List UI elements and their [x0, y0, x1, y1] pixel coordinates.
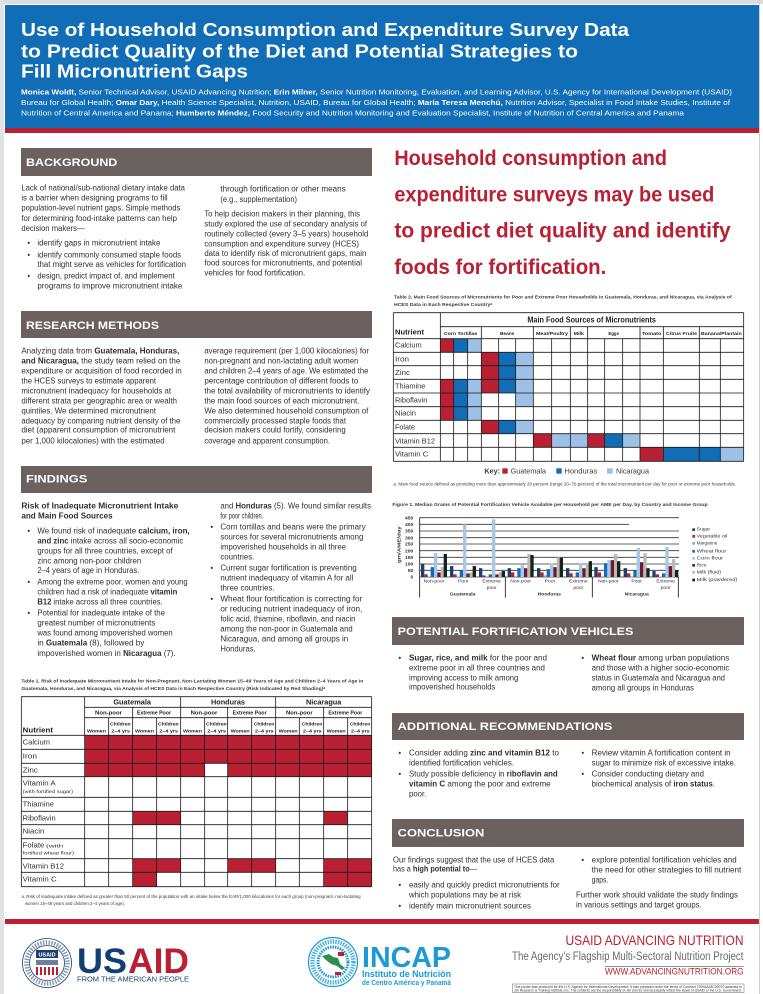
text: conclusion body: identify main micronutrient sources [409, 901, 531, 910]
text: recommendations bullets: Review vitamin A fortification content in [592, 748, 731, 757]
table 1 header labels: 2–4 yrs [159, 728, 178, 733]
text: background right column: vehicles for food fortification. [204, 269, 305, 278]
table 1 nutrient labels: Calcium [23, 738, 50, 747]
text: findings right column: or reducing nutrient inadequacy of iron, [220, 604, 362, 613]
panel: potential fortification vehicles [392, 617, 744, 692]
table 1 nutrient labels: Zinc [23, 766, 38, 775]
table 2 nutrient labels: Vitamin C [395, 450, 429, 459]
text: conclusion body: easily and quickly predict micronutrients for [409, 880, 560, 889]
disclaimer box [512, 984, 744, 993]
table 1 nutrient labels: Thiamine [23, 800, 54, 809]
text: research methods right column: We also determined household consumption of [204, 406, 369, 415]
text: research methods left column: diet (apparent consumption of micronutrient [21, 426, 176, 435]
text: background left column: identify commonly consumed staple foods [37, 251, 181, 260]
table 2 nutrient labels: Niacin [395, 409, 416, 418]
text: findings left column: and Main Food Sources [21, 512, 113, 521]
table 1 header labels: Extreme Poor [137, 710, 172, 716]
x axis labels: Poor [545, 578, 556, 584]
text: findings right column: sources for several micronutrients among [220, 532, 363, 541]
text: findings left column: B12 intake across all three countries. [37, 597, 163, 606]
chart legend [692, 527, 738, 583]
x axis labels: Non-poor [510, 578, 531, 584]
text: research methods right column: commercially processed staple foods that [204, 416, 347, 425]
text: findings left column: greatest number of micronutrients [37, 618, 155, 627]
title: Use of Household Consumption and Expenditure Survey Data [21, 19, 630, 40]
text: findings right column: nutrient inadequacy of vitamin A for all [220, 573, 354, 582]
y axis labels: 350 [405, 529, 414, 535]
table 1 header labels: Children [254, 721, 274, 726]
text: findings right column [210, 502, 371, 653]
heading: findings: FINDINGS [26, 474, 87, 486]
table 1 header labels: Women [135, 728, 154, 733]
y axis labels: 450 [405, 515, 414, 521]
y axis title: gm/AME/day [397, 526, 403, 563]
table 1 header labels: Women [87, 728, 106, 733]
text: findings left column: • [27, 577, 30, 586]
text: findings right column: Honduras. [220, 644, 256, 653]
x axis labels: Extreme [656, 578, 675, 584]
table 2 key: Honduras [564, 466, 598, 475]
text: research methods left column: adequacy by comparing nutrient density of the [21, 416, 181, 425]
text: fortification bullets: Wheat flour among urban populations [592, 653, 729, 662]
x axis labels: poor [573, 585, 584, 591]
text: research methods left column: quintiles. We determined micronutrient [21, 406, 157, 415]
chart legend: Sugar [697, 527, 710, 533]
table 2 caption [394, 294, 732, 308]
text: conclusion body: • [398, 901, 401, 910]
text: findings left column: was found among impoverished women [36, 628, 173, 637]
table 2 header labels: Beans [500, 331, 515, 336]
text: findings right column: folic acid, thiamine, riboflavin, and niacin [220, 614, 355, 623]
text: recommendations bullets: • [398, 769, 401, 778]
text: background left column [21, 184, 186, 291]
text: recommendations bullets: • [581, 748, 584, 757]
key message headline: expenditure surveys may be used [394, 182, 714, 206]
text: research methods left column [21, 347, 182, 445]
text: findings right column: three countries. [220, 583, 275, 592]
INCAP tagline: Instituto de Nutrición [362, 969, 451, 980]
table 2 header labels: Milk [574, 331, 584, 336]
table 1 header labels: Honduras [211, 697, 245, 706]
disclaimer box: JSI Research & Training Institute, Inc. The contents are the responsibility of JSI and do not necessarily reflect the views of USAID or the U.S. Government. [514, 989, 742, 993]
text: conclusion body: Our findings suggest that the use of HCES data [393, 855, 555, 864]
text: research methods right column: the total availability of micronutrients to identify [204, 386, 370, 395]
table 2 header labels: Meat/Poultry [536, 331, 568, 336]
authors [21, 87, 732, 118]
text: recommendations bullets: • [581, 769, 584, 778]
table 2 coloured cells [440, 339, 744, 461]
table 1 header labels: Children [206, 721, 227, 726]
text: findings left column: Risk of Inadequate Micronutrient Intake [21, 502, 179, 511]
text: conclusion body [393, 855, 742, 910]
text: background right column: routinely collected (every 3–5 years) household [204, 230, 368, 239]
text: findings left column: • [27, 608, 30, 617]
text: background left column: • [27, 251, 30, 260]
INCAP tagline: de Centro América y Panamá [362, 978, 452, 987]
table 1 nutrient labels: (with [46, 844, 64, 850]
table 1 nutrient labels [23, 738, 74, 884]
y axis labels: 150 [405, 555, 414, 561]
text: recommendations bullets: Study possible deficiency in riboflavin and [409, 769, 558, 778]
text: background left column: Lack of national/sub-national dietary intake data [21, 184, 186, 193]
x axis labels: Honduras [538, 592, 561, 598]
text: findings left column: Potential for inadequate intake of the [37, 608, 166, 617]
heading: research methods: RESEARCH METHODS [26, 320, 159, 332]
table 1 header labels: Women [279, 728, 298, 733]
table 2 key: Guatemala [511, 466, 547, 475]
text: conclusion body: in various settings and target groups. [576, 900, 702, 909]
text: fortification bullets: among all groups in Honduras [592, 683, 694, 692]
text: background right column [204, 185, 368, 278]
table 2 header labels: Nutrient [395, 328, 425, 337]
title: to Predict Quality of the Diet and Potential Strategies to [21, 40, 578, 61]
table 1 nutrient labels: Folate [23, 841, 44, 850]
USAID wordmark: US [77, 942, 127, 981]
text: recommendations bullets: sugar to minimize risk of excessive intake. [592, 758, 736, 767]
text: background left column: programs to improve micronutrient intake [37, 282, 183, 291]
text: findings right column: and Honduras (5). We found similar results [220, 502, 371, 511]
table 2 key: Key: [484, 466, 500, 475]
y axis labels: 400 [405, 522, 414, 528]
text: research methods left column: Analyzing data from Guatemala, Honduras, [21, 347, 179, 356]
text: research methods right column: and children 2–4 years of age. We estimated the [204, 367, 369, 376]
table 2 header labels: Main Food Sources of Micronutrients [527, 316, 656, 325]
text: findings left column: in Guatemala (8), followed by [37, 638, 144, 647]
table 1 header labels: Women [183, 728, 202, 733]
chart legend: Margarine [697, 540, 718, 546]
table 2 header labels: Citrus Fruits [666, 331, 697, 336]
panel: conclusion [392, 819, 744, 910]
table 2 caption: HCES Data in Each Respective Countryᵃ [394, 302, 492, 308]
chart legend: Corn flour [697, 555, 723, 561]
y axis labels: 50 [408, 568, 414, 574]
text: background right column: food sources for micronutrients, and potential [204, 259, 362, 268]
text: research methods left column: the HCES surveys to estimate apparent [21, 377, 157, 386]
text: findings right column: Current sugar fortification is preventing [220, 563, 357, 572]
text: findings left column: • [27, 526, 30, 535]
figure caption: Figure 1. Median Grams of Potential Fortification Vehicle Available per Household per AME per Day, by Country and Income Group [392, 502, 708, 508]
text: research methods right column: coverage and apparent consumption. [204, 436, 330, 445]
icon: USAID seal: USAID [38, 952, 56, 958]
y axis labels: 200 [405, 548, 414, 554]
table 1 nutrient labels: Vitamin A [23, 779, 57, 788]
text: findings right column: among the non-poor in Guatemala and [220, 624, 353, 633]
chart legend: Rice [697, 562, 707, 568]
heading: background: BACKGROUND [26, 157, 117, 169]
text: background left column: • [27, 272, 30, 281]
text: findings right column: Corn tortillas and beans were the primary [220, 523, 366, 532]
table 1 nutrient labels: (with fortified sugar) [23, 789, 73, 795]
y axis labels [405, 515, 414, 581]
text: fortification bullets: improving access to milk among [409, 673, 518, 682]
heading: additional recommendations [392, 713, 744, 740]
text: findings left column: groups for all three countries, except of [37, 546, 173, 555]
text: recommendations bullets [398, 748, 736, 798]
text: conclusion body: gaps. [592, 875, 608, 884]
bars [421, 519, 678, 577]
table 1 nutrient labels: Vitamin C [23, 875, 57, 884]
text: fortification bullets: Sugar, rice, and milk for the poor and [409, 653, 547, 662]
text: background left column: is a barrier when designing programs to fill [21, 194, 168, 203]
table 2 nutrient labels: Iron [395, 355, 409, 364]
table 1 nutrient labels: Riboflavin [23, 813, 56, 822]
table 1 header labels: Women [231, 728, 250, 733]
key message headline: to predict diet quality and identify [394, 219, 731, 243]
table 2 header labels [395, 316, 742, 337]
disclaimer box: This poster was produced for the U.S. Agency for International Development. It was prepared under the terms of Contract 7200AA18C00070 awarded to [514, 985, 742, 989]
panel: additional recommendations [392, 713, 744, 798]
text: findings right column: Nicaragua, and among all groups in [220, 634, 348, 643]
x axis labels: Non-poor [598, 578, 619, 584]
table 2 nutrient labels: Calcium [395, 341, 422, 350]
text: research methods right column: the main food sources of each micronutrient. [204, 396, 359, 405]
table 1 header labels: 2–4 yrs [303, 728, 322, 733]
table 1 header labels: 2–4 yrs [207, 728, 226, 733]
footer band [5, 919, 759, 993]
USAID wordmark [77, 942, 189, 981]
text: recommendations bullets: identified fortification vehicles. [409, 758, 514, 767]
text: findings right column: • [210, 594, 213, 603]
table 2 nutrient labels [395, 341, 435, 459]
key message headline: foods for fortification. [394, 255, 606, 279]
panel: findings [21, 466, 372, 658]
text: findings left column: 2–4 years of age in Honduras. [37, 566, 139, 575]
table 1 header labels: Children [302, 721, 322, 726]
table 2 key [484, 466, 650, 475]
table 1 header labels: 2–4 yrs [351, 728, 370, 733]
table 1 nutrient labels: Niacin [23, 827, 44, 836]
text: research methods right column: average requirement (per 1,000 kilocalories) for [204, 347, 369, 356]
x axis labels: Extreme [569, 578, 588, 584]
y axis labels: 0 [411, 575, 414, 581]
text: recommendations bullets: poor. [409, 789, 426, 798]
heading: additional recommendations: ADDITIONAL RECOMMENDATIONS [398, 721, 612, 733]
text: findings left column: We found risk of inadequate calcium, iron, [37, 526, 190, 535]
table 1 header labels: Nutrient [23, 725, 54, 734]
table 2 key: Nicaragua [616, 466, 650, 475]
text: background right column: To help decision makers in their planning, this [204, 210, 360, 219]
icon: INCAP seal [308, 938, 358, 986]
text: background right column: consumption and expenditure survey (HCES) [204, 240, 359, 249]
table 2 nutrient labels: Zinc [395, 368, 410, 377]
text: background left column: • [27, 239, 30, 248]
table 1 header labels: Children [110, 721, 131, 726]
text: research methods left column: micronutrient inadequacy for households at [21, 386, 172, 395]
x axis labels: poor [487, 585, 497, 591]
text: conclusion body: which populations may be at risk [408, 890, 521, 899]
table 1: risk of inadequate intake [21, 679, 372, 906]
authors: Nutrition of Central America and Panama; Humberto Méndez, Food Security and Nutrition Monitoring and Evaluation Specialist, Institute of Nutrition of Central America and Panama [21, 109, 685, 118]
text: findings right column: impoverished households in all three [220, 542, 347, 551]
x axis labels [424, 578, 675, 598]
icon: USAID seal [22, 938, 72, 988]
text: findings left column: impoverished women in Nicaragua (7). [37, 649, 176, 658]
USAID tagline: FROM THE AMERICAN PEOPLE [77, 975, 189, 984]
text: background left column: for determining food-intake patterns can help [21, 214, 178, 223]
project identity block: WWW.ADVANCINGNUTRITION.ORG [605, 966, 744, 978]
text: recommendations bullets: Consider conducting dietary and [592, 769, 704, 778]
title: Fill Micronutrient Gaps [21, 61, 248, 82]
text: findings right column: for poor children. [220, 512, 263, 521]
table 1 header labels: Guatemala [113, 697, 152, 706]
x axis labels: poor [661, 585, 671, 591]
table 1 header labels: 2–4 yrs [255, 728, 274, 733]
x axis labels: Poor [631, 578, 642, 584]
text: fortification bullets: and those with a higher socio-economic [592, 663, 729, 672]
table 2 nutrient labels: Folate [395, 423, 415, 432]
text: findings left column: and zinc intake across all socio-economic [37, 536, 183, 545]
table 1 header labels: Non-poor [286, 710, 313, 716]
table 2 caption: Table 2. Main Food Sources of Micronutrients for Poor and Extreme Poor Households in Guatemala, Honduras, and Nicaragua, via Analysis of [394, 294, 732, 300]
text: research methods right column [204, 347, 370, 445]
table 2: main food sources [393, 294, 744, 487]
text: conclusion body: Further work should validate the study findings [576, 890, 738, 899]
table 2 header labels: Corn Tortillas [444, 331, 478, 336]
project identity block [512, 932, 744, 978]
text: recommendations bullets: biochemical analysis of iron status. [592, 779, 715, 788]
text: findings right column: • [210, 523, 213, 532]
table 1 header labels: Extreme Poor [328, 710, 363, 716]
table 1 nutrient labels: fortified wheat flour) [23, 851, 74, 857]
table 1 footnote: women 15–49 years and children 2–4 years of age). [25, 901, 125, 906]
table 2 header labels: Eggs [608, 331, 619, 336]
heading: findings [21, 466, 372, 493]
header banner [5, 5, 759, 133]
text: findings left column: zinc among non-poor children [37, 556, 141, 565]
table 1 header labels: Extreme Poor [233, 710, 267, 716]
x axis labels: Extreme [482, 578, 501, 584]
table 1 header labels: Non-poor [95, 710, 123, 716]
text: background left column: design, predict impact of, and implement [37, 272, 175, 281]
table 1 nutrient labels: Iron [23, 752, 37, 761]
table 1 nutrient labels: Vitamin B12 [23, 862, 64, 871]
table 1 caption: Table 1. Risk of Inadequate Micronutrient Intake for Non-Pregnant, Non-Lactating Women 15–49 Years of Age and Children 2–4 Years of Age in [21, 679, 363, 685]
text: fortification bullets [398, 653, 729, 692]
table 1 header labels: 2–4 yrs [111, 728, 130, 733]
text: background right column: (e.g., supplementation) [220, 195, 297, 204]
heading: research methods [21, 311, 372, 338]
panel: research methods [21, 311, 372, 445]
text: fortification bullets: • [581, 653, 584, 662]
heading: conclusion [392, 819, 744, 847]
INCAP tagline [362, 969, 452, 987]
x axis labels: Nicaragua [625, 592, 649, 598]
text: fortification bullets: impoverished households [409, 683, 495, 692]
text: conclusion body: • [398, 880, 401, 889]
text: background left column: decision makers— [21, 224, 85, 233]
figure 1: bar chart of fortification vehicles [392, 502, 738, 598]
x axis labels: Non-poor [424, 578, 445, 584]
table 1 header labels [23, 697, 370, 734]
table 1 red risk cells [85, 735, 372, 887]
table 1 header labels: Children [350, 721, 370, 726]
text: background left column: population-level nutrient gaps. Simple methods [21, 204, 180, 213]
text: research methods left column: expenditure or acquisition of food recorded in [21, 367, 182, 376]
table 2 nutrient labels: Vitamin B12 [395, 436, 435, 445]
text: background right column: study explored the use of secondary analysis of [204, 220, 368, 229]
text: findings left column: Among the extreme poor, women and young [37, 577, 188, 586]
chart legend: Wheat flour [697, 548, 727, 554]
table 1 header labels: Women [327, 728, 346, 733]
text: findings right column: Wheat flour fortification is correcting for [220, 594, 363, 603]
authors: Bureau for Global Health; Omar Dary, Health Science Specialist, Nutrition, USAID, Bureau for Global Health; María Teresa Menchú, Nutrition Advisor, Specialist in Food Intake Studies, Institute of [21, 98, 731, 107]
table 1 header labels: Non-poor [191, 710, 218, 716]
x axis labels: Poor [458, 578, 469, 584]
title [21, 19, 630, 82]
text: fortification bullets: status in Guatemala and Nicaragua and [592, 673, 725, 682]
heading: conclusion: CONCLUSION [398, 828, 484, 840]
text: recommendations bullets: • [398, 748, 401, 757]
table 2 header labels: Tomato [642, 331, 662, 336]
table 2 header labels: Banana/Plantain [701, 331, 742, 336]
key message headline: Household consumption and [394, 146, 667, 170]
heading: potential fortification vehicles: POTENTIAL FORTIFICATION VEHICLES [398, 626, 633, 638]
text: findings right column: • [210, 563, 213, 572]
table 1 header labels: Children [158, 721, 179, 726]
INCAP wordmark: INCAP [362, 942, 451, 974]
text: findings left column: children had a risk of inadequate vitamin [37, 587, 177, 596]
text: research methods right column: non-pregnant and non-lactating adult women [204, 357, 358, 366]
text: conclusion body: • [581, 855, 584, 864]
chart legend: Vegetable oil [697, 533, 727, 539]
text: background left column: identify gaps in micronutrient intake [37, 239, 161, 248]
chart legend: Milk (fluid) [697, 569, 721, 575]
text: fortification bullets: • [398, 653, 401, 662]
table 2 nutrient labels: Riboflavin [395, 395, 427, 404]
table 1 footnote: a. Risk of inadequate intake defined as greater than 50 percent of the population with an intake below the EAR/1,000 kilocalories for each group (non-pregnant, non-lactating [21, 894, 361, 899]
logo: INCAP [308, 938, 452, 987]
table 1 footnote [21, 894, 361, 906]
text: findings left column [21, 502, 190, 658]
text: conclusion body: explore potential fortification vehicles and [592, 855, 737, 864]
y axis labels: 300 [405, 535, 414, 541]
text: conclusion body: has a high potential to— [393, 865, 477, 874]
USAID wordmark: AID [128, 942, 189, 981]
panel: background [21, 148, 372, 291]
text: research methods left column: and Nicaragua, the study team relied on the [21, 357, 181, 366]
text: background right column: through fortification or other means [220, 185, 346, 194]
y axis labels: 250 [405, 542, 414, 548]
x axis labels: Guatemala [450, 592, 476, 598]
text: background left column: that might serve as vehicles for fortification [37, 260, 186, 269]
text: conclusion body: the need for other strategies to fill nutrient [592, 865, 742, 874]
table 2 footnote: a. Main food source defined as providing more than approximately 20 percent (range 20–76 percent) of the total micronutrient per day for poor or extreme poor households. [393, 482, 736, 487]
table 1 caption [21, 679, 363, 692]
heading: background [21, 148, 372, 176]
table 2 nutrient labels: Thiamine [395, 382, 425, 391]
logo: USAID [22, 938, 189, 988]
heading: potential fortification vehicles [392, 617, 744, 645]
text: background right column: data to identify risk of micronutrient gaps, main [204, 249, 366, 258]
text: recommendations bullets: Consider adding zinc and vitamin B12 to [409, 748, 560, 757]
table 1 header labels: Nicaragua [306, 697, 342, 706]
text: research methods left column: different strata per geographic area or wealth [21, 396, 177, 405]
text: recommendations bullets: vitamin C among the poor and extreme [409, 779, 551, 788]
table 1 caption: Guatemala, Honduras, and Nicaragua, via Analysis of HCES Data in Each Respective Country (Risk Indicated by Red Shading)ᵃ [21, 686, 325, 692]
text: research methods right column: decision makers could fortify, considering [204, 426, 346, 435]
text: fortification bullets: extreme poor in all three countries and [409, 663, 545, 672]
text: findings right column: countries. [220, 552, 254, 561]
text: research methods right column: percentage contribution of different foods to [204, 377, 359, 386]
authors: Monica Woldt, Senior Technical Advisor, USAID Advancing Nutrition; Erin Milner, Senior Nutrition Monitoring, Evaluation, and Learning Advisor, U.S. Agency for International Development (USAID) [21, 87, 732, 96]
y axis labels: 100 [405, 562, 414, 568]
key message headline [394, 146, 731, 279]
chart legend: Milk (powdered) [697, 577, 738, 583]
text: research methods left column: per 1,000 kilocalories) with the estimated [21, 436, 165, 445]
